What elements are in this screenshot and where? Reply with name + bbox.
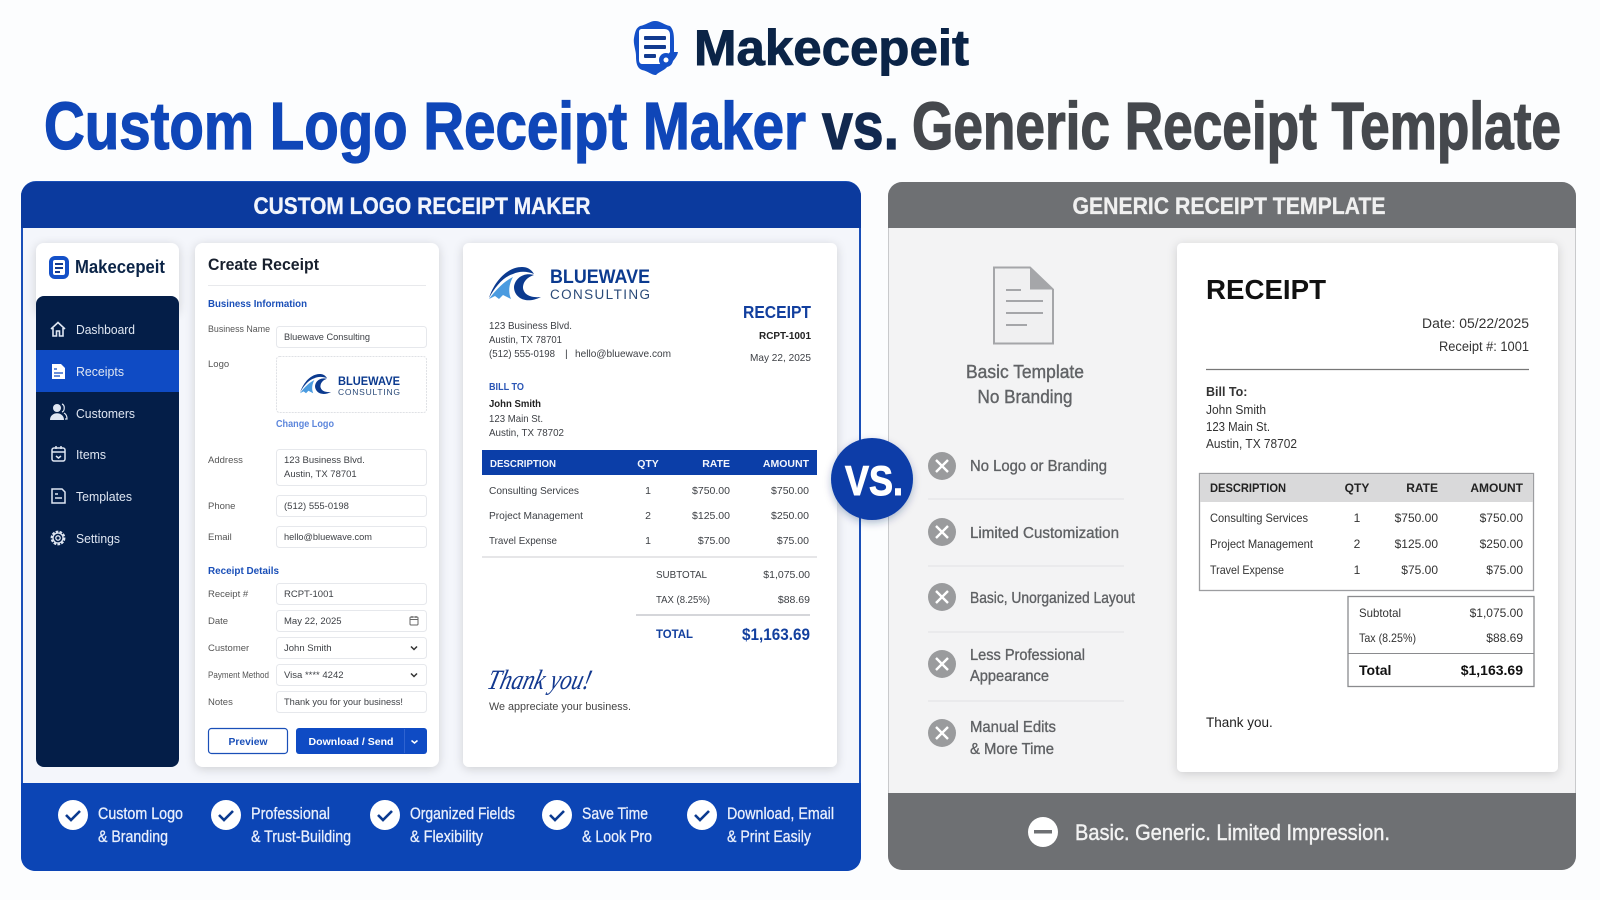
generic bill to: Bill To: xyxy=(1206,385,1247,399)
section: receipt details: Customer xyxy=(208,643,249,654)
line items table: QTY xyxy=(637,458,659,470)
generic table xyxy=(1200,474,1534,590)
generic table: $75.00 xyxy=(1486,563,1523,577)
section: business information: Address xyxy=(208,455,243,466)
benefit: save time: Save Time xyxy=(582,804,648,823)
line items table: Project Management xyxy=(489,510,583,522)
totals: $1,163.69 xyxy=(742,625,810,644)
panel: branded receipt xyxy=(463,243,837,767)
generic table: $750.00 xyxy=(1395,511,1438,525)
section: business information: Austin, TX 78701 xyxy=(284,469,357,480)
generic bill to: 123 Main St. xyxy=(1206,420,1270,434)
generic table: $250.00 xyxy=(1480,537,1523,551)
line items table: 1 xyxy=(645,485,651,497)
generic table: 2 xyxy=(1354,537,1361,551)
section: receipt details: May 22, 2025 xyxy=(284,616,342,627)
section: business information: (512) 555-0198 xyxy=(284,501,349,512)
limitation: manual edits xyxy=(928,719,1056,758)
bill to: BILL TO xyxy=(489,382,524,393)
totals: $88.69 xyxy=(778,594,810,606)
limitation: appearance: Appearance xyxy=(970,668,1049,685)
line items table: $750.00 xyxy=(771,485,809,497)
icon: small logo xyxy=(49,256,69,279)
nav dashboard: Dashboard xyxy=(76,323,135,337)
limitation: appearance xyxy=(928,647,1085,685)
icon: chevron xyxy=(411,646,417,650)
icon: settings xyxy=(52,532,64,544)
generic table: RATE xyxy=(1406,481,1438,495)
nav receipts: Receipts xyxy=(76,365,124,379)
footer message: Basic. Generic. Limited Impression. xyxy=(1075,820,1390,845)
basic template label xyxy=(966,361,1084,407)
line items table: DESCRIPTION xyxy=(490,458,556,470)
receipt meta: RCPT-1001 xyxy=(759,330,811,342)
generic totals: Tax (8.25%) xyxy=(1359,631,1416,645)
icon: receipt logo xyxy=(634,21,678,75)
basic template label: Basic Template xyxy=(966,361,1084,382)
bill to: Austin, TX 78702 xyxy=(489,427,564,439)
icon: items xyxy=(52,446,65,461)
nav items: Items xyxy=(76,448,106,462)
line items table: $75.00 xyxy=(777,535,809,547)
download button xyxy=(296,728,427,754)
line items table: 2 xyxy=(645,510,651,522)
generic receipt xyxy=(1177,243,1558,772)
benefit: custom logo: Custom Logo xyxy=(98,804,183,823)
benefit: professional xyxy=(211,800,351,846)
line items table: Consulting Services xyxy=(489,485,579,497)
nav customers: Customers xyxy=(76,407,135,421)
generic totals: $1,075.00 xyxy=(1470,606,1523,620)
generic bill to: Austin, TX 78702 xyxy=(1206,437,1297,451)
form heading: Create Receipt xyxy=(208,255,319,274)
thank you note xyxy=(484,665,631,713)
section: receipt details: Receipt Details xyxy=(208,565,279,577)
line items table: $750.00 xyxy=(692,485,730,497)
benefit: save time: & Look Pro xyxy=(582,827,652,846)
totals: TAX (8.25%) xyxy=(656,594,710,606)
download button: Download / Send xyxy=(308,736,394,748)
limitation: manual edits: & More Time xyxy=(970,741,1054,758)
nav settings: Settings xyxy=(76,532,120,546)
section: business information: Email xyxy=(208,532,232,543)
limitation: manual edits: Manual Edits xyxy=(970,719,1056,736)
limitations list xyxy=(928,452,1135,758)
line items table: $75.00 xyxy=(698,535,730,547)
generic table: AMOUNT xyxy=(1470,481,1524,495)
generic totals: Subtotal xyxy=(1359,606,1401,620)
panel: create receipt form xyxy=(195,243,439,767)
generic table: QTY xyxy=(1345,481,1369,495)
benefit: download: & Print Easily xyxy=(727,827,811,846)
company address: (512) 555-0198 xyxy=(489,348,555,360)
line items table: Travel Expense xyxy=(489,535,557,547)
icon: minus xyxy=(1028,817,1058,847)
benefit: custom logo: & Branding xyxy=(98,827,168,846)
benefit: professional: Professional xyxy=(251,804,330,823)
company name xyxy=(550,267,650,302)
limitation: layout: Basic, Unorganized Layout xyxy=(970,590,1135,607)
title: Custom Logo Receipt Maker xyxy=(44,89,806,164)
benefit: organized fields: Organized Fields xyxy=(410,804,515,823)
generic totals: Total xyxy=(1359,662,1391,678)
panel: generic receipt template xyxy=(888,182,1576,870)
section: business information: Bluewave Consulting xyxy=(284,332,370,343)
icon: customers xyxy=(50,404,67,420)
active nav item xyxy=(36,350,179,392)
totals: TOTAL xyxy=(656,627,693,641)
logo wordmark: Makecepeit xyxy=(694,20,969,76)
generic totals xyxy=(1348,596,1534,686)
generic table: 1 xyxy=(1354,511,1361,525)
section: receipt details: RCPT-1001 xyxy=(284,589,334,600)
benefit: organized fields xyxy=(370,800,515,846)
date and number: Receipt #: 1001 xyxy=(1439,339,1529,354)
benefit: download: Download, Email xyxy=(727,804,834,823)
section: business information: hello@bluewave.com xyxy=(284,532,372,543)
limitation: layout xyxy=(928,583,1135,611)
line items table: 1 xyxy=(645,535,651,547)
company address: hello@bluewave.com xyxy=(575,348,671,360)
icon: bluewave logo xyxy=(489,267,541,300)
line items table xyxy=(482,450,817,557)
icon: chevron xyxy=(411,674,417,676)
generic bill to xyxy=(1206,385,1297,451)
bill to: John Smith xyxy=(489,398,541,410)
totals xyxy=(636,569,810,644)
preview button xyxy=(208,728,288,754)
icon: bluewave logo small xyxy=(300,374,331,394)
totals: SUBTOTAL xyxy=(656,569,707,581)
right panel header: GENERIC RECEIPT TEMPLATE xyxy=(1072,193,1386,220)
receipt meta: May 22, 2025 xyxy=(750,352,811,364)
limitation: customization xyxy=(928,518,1119,546)
section: business information: Business Name xyxy=(208,324,270,335)
generic receipt heading: RECEIPT xyxy=(1206,274,1326,305)
section: business information: Business Information xyxy=(208,298,307,310)
line items table: $250.00 xyxy=(771,510,809,522)
vs badge xyxy=(831,438,913,520)
company address xyxy=(489,320,671,360)
generic totals: $1,163.69 xyxy=(1461,662,1523,678)
company address: 123 Business Blvd. xyxy=(489,320,572,332)
section: business information: Phone xyxy=(208,501,235,512)
line items table: RATE xyxy=(702,458,730,470)
section: receipt details: Notes xyxy=(208,697,233,708)
company address: | xyxy=(565,348,568,360)
section: receipt details: Thank you for your business! xyxy=(284,697,403,708)
generic table: DESCRIPTION xyxy=(1210,481,1286,495)
company name: BLUEWAVE xyxy=(550,267,650,288)
company address: Austin, TX 78701 xyxy=(489,334,562,346)
company name: CONSULTING xyxy=(550,287,650,302)
benefit: custom logo xyxy=(58,800,183,846)
generic table: $750.00 xyxy=(1480,511,1523,525)
generic table: Project Management xyxy=(1210,537,1314,551)
title: vs. xyxy=(822,89,899,164)
limitation: customization: Limited Customization xyxy=(970,525,1119,542)
section: business information: Logo xyxy=(208,359,229,370)
title xyxy=(44,89,1561,164)
section: business information: Change Logo xyxy=(276,419,334,430)
icon: home xyxy=(51,322,65,336)
section: receipt details: Date xyxy=(208,616,228,627)
date and number: Date: 05/22/2025 xyxy=(1422,316,1529,331)
thank you note: We appreciate your business. xyxy=(489,701,631,713)
left panel header: CUSTOM LOGO RECEIPT MAKER xyxy=(254,193,590,220)
section: receipt details: Payment Method xyxy=(208,670,269,681)
icon: calendar xyxy=(410,616,418,625)
receipt meta xyxy=(743,302,811,364)
generic bill to: John Smith xyxy=(1206,403,1266,417)
benefit: professional: & Trust-Building xyxy=(251,827,351,846)
nav templates: Templates xyxy=(76,490,132,504)
generic table: 1 xyxy=(1354,563,1361,577)
section: business information: CONSULTING xyxy=(338,387,400,397)
generic thank you: Thank you. xyxy=(1206,715,1273,730)
section: receipt details xyxy=(208,565,426,712)
brand logo xyxy=(634,20,969,76)
limitation: no logo: No Logo or Branding xyxy=(970,458,1107,475)
receipt meta: RECEIPT xyxy=(743,302,811,322)
generic table: Travel Expense xyxy=(1210,563,1284,577)
generic footer xyxy=(888,793,1576,870)
generic table: $75.00 xyxy=(1401,563,1438,577)
benefits bar xyxy=(21,783,861,871)
section: receipt details: Visa **** 4242 xyxy=(284,670,344,681)
logo name small: BLUEWAVE xyxy=(338,376,400,388)
benefit: organized fields: & Flexibility xyxy=(410,827,483,846)
left panel header xyxy=(21,182,861,228)
benefit: download xyxy=(687,800,834,846)
app sidebar xyxy=(36,243,179,767)
date and number xyxy=(1422,316,1529,354)
sidebar logo text: Makecepeit xyxy=(75,257,165,277)
thank you note: Thank you! xyxy=(484,665,595,696)
right panel header xyxy=(888,182,1576,228)
panel: custom logo receipt maker xyxy=(21,182,861,871)
limitation: no logo xyxy=(928,452,1107,480)
bill to: 123 Main St. xyxy=(489,413,543,425)
totals: $1,075.00 xyxy=(763,569,810,581)
icon: blank document xyxy=(994,268,1053,344)
section: business information: 123 Business Blvd. xyxy=(284,455,365,466)
benefit: save time xyxy=(542,800,652,846)
section: business information xyxy=(208,298,426,548)
icon: receipts xyxy=(52,364,65,379)
section: receipt details: Receipt # xyxy=(208,589,249,600)
vs badge: VS. xyxy=(845,457,903,504)
basic template label: No Branding xyxy=(978,386,1072,407)
section: receipt details: John Smith xyxy=(284,643,332,654)
bill to xyxy=(489,382,564,439)
generic table: $125.00 xyxy=(1395,537,1438,551)
line items table: AMOUNT xyxy=(763,458,810,470)
line items table: $125.00 xyxy=(692,510,730,522)
generic totals: $88.69 xyxy=(1486,631,1523,645)
generic table: Consulting Services xyxy=(1210,511,1308,525)
limitation: appearance: Less Professional xyxy=(970,647,1085,664)
icon: templates xyxy=(52,489,65,503)
preview button: Preview xyxy=(228,736,268,748)
